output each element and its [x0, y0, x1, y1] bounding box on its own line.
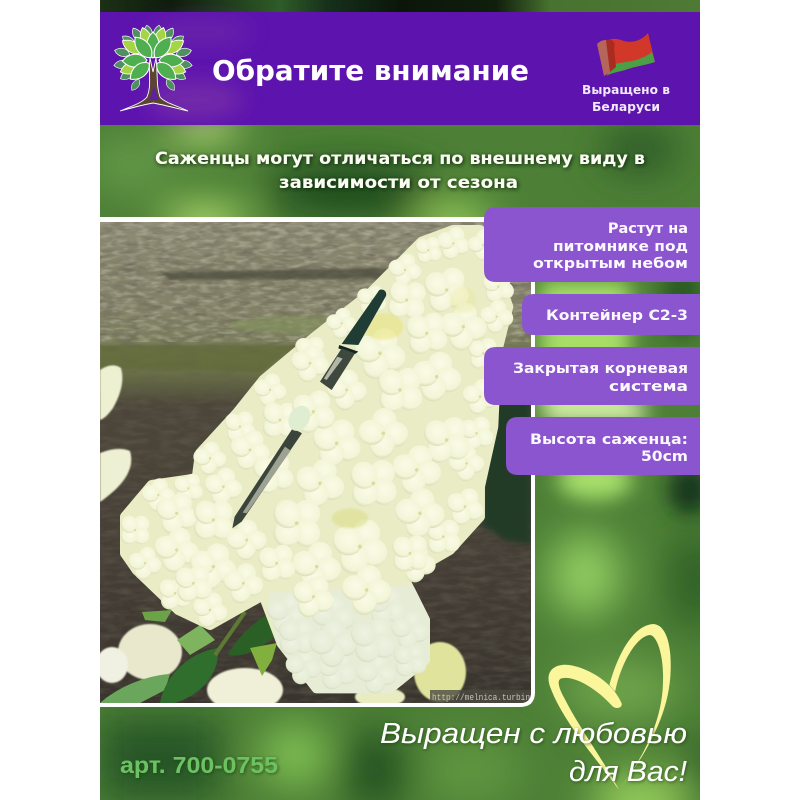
logo trunk	[120, 58, 188, 111]
pill: height: Высота саженца:	[530, 432, 688, 448]
slogan	[381, 722, 688, 784]
subtitle text	[155, 149, 645, 193]
green bokeh background: upper band	[100, 125, 687, 217]
icon: tree logo	[113, 25, 193, 111]
watermark: http://melnica.turbin	[432, 693, 530, 703]
pill: grown outdoors: Растут на	[608, 221, 688, 237]
pill: grown outdoors: открытым небом	[533, 256, 688, 272]
article number: арт. 700-0755	[120, 752, 278, 778]
label: grown in Belarus: Беларуси	[592, 100, 660, 114]
info pills	[484, 207, 700, 475]
spruce foliage	[482, 395, 531, 545]
watermark	[430, 690, 531, 703]
pill: grown outdoors: питомнике под	[553, 239, 688, 255]
main flower head	[111, 222, 521, 697]
bottom-left blooms	[96, 624, 466, 712]
logo leaves	[113, 25, 193, 92]
page background	[90, 0, 723, 800]
pill: height: 50cm	[641, 449, 688, 465]
pen	[232, 290, 386, 528]
top strip	[100, 0, 662, 12]
edge florets	[111, 222, 521, 633]
pill: container	[522, 294, 700, 335]
subtitle text: Саженцы могут отличаться по внешнему виду в	[155, 149, 645, 169]
photo: hydrangea	[96, 222, 531, 712]
pill: closed roots: система	[609, 379, 688, 395]
purple header panel	[100, 12, 700, 125]
icon: Belarus flag	[597, 33, 655, 76]
green bokeh background: right side	[540, 260, 712, 516]
flower silhouette	[125, 230, 508, 688]
infographic canvas	[100, 0, 700, 800]
slogan: для Вас!	[569, 756, 687, 788]
icon: yellow heart	[549, 624, 671, 790]
pill: container: Контейнер C2-3	[546, 308, 688, 324]
pill: closed roots	[484, 347, 700, 405]
pill: height	[506, 417, 700, 475]
petals over pen	[288, 390, 334, 433]
pill: grown outdoors	[484, 207, 700, 282]
photo frame	[100, 217, 535, 707]
pill: closed roots: Закрытая корневая	[513, 361, 688, 377]
green bokeh background: bottom band	[100, 718, 723, 800]
flower shading	[332, 287, 477, 528]
label: grown in Belarus: Выращено в	[582, 83, 670, 97]
lower cluster tint	[273, 590, 425, 688]
side blooms	[100, 365, 131, 502]
leaves	[100, 610, 277, 703]
label: grown in Belarus	[583, 85, 670, 114]
subtitle text: зависимости от сезона	[279, 173, 518, 193]
photo ground	[100, 222, 531, 703]
florets	[148, 257, 491, 625]
lower cluster florets	[267, 594, 427, 694]
title: Обратите внимание	[212, 54, 529, 87]
slogan: Выращен с любовью	[380, 718, 687, 750]
